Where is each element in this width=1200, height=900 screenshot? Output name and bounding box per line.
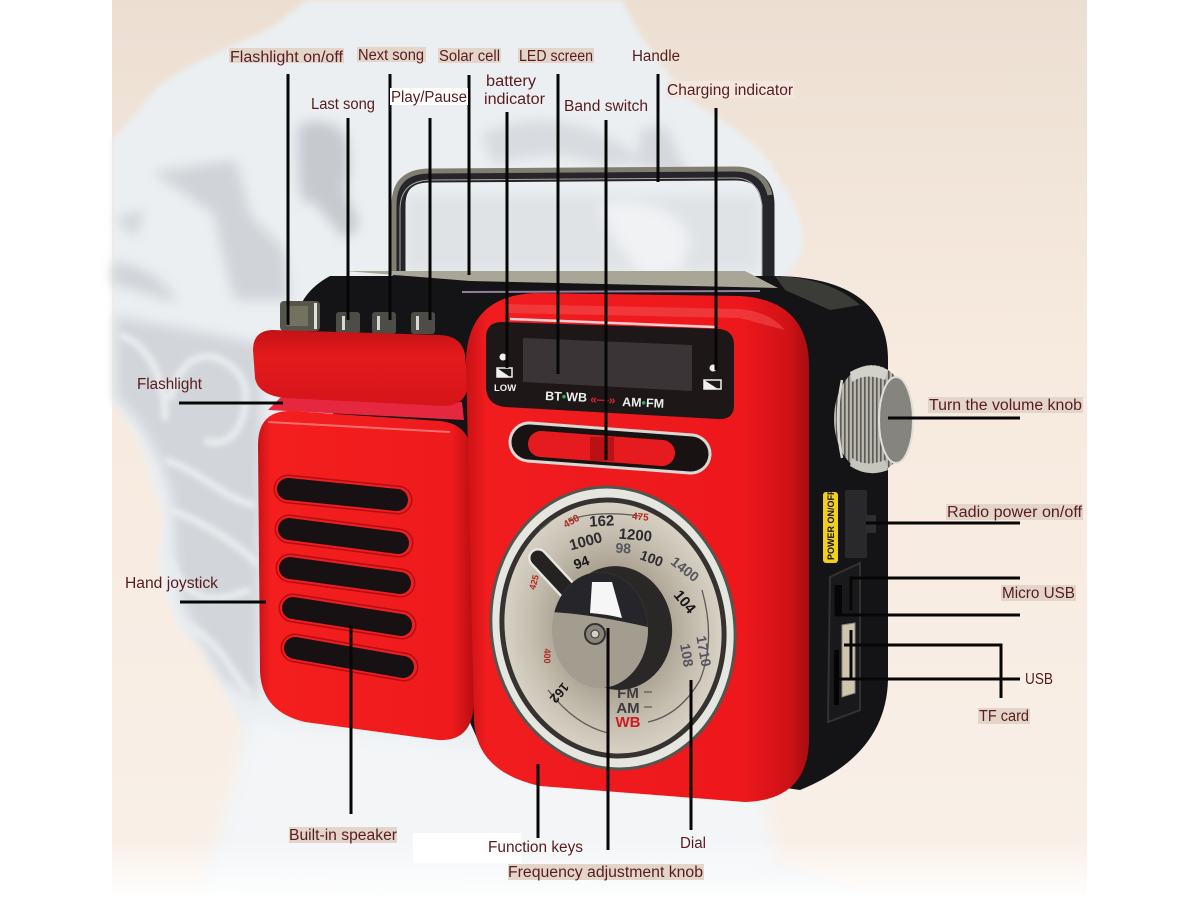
label: Turn the volume knob: Turn the volume knob [929, 397, 1082, 414]
flashlight on/off button [280, 301, 320, 331]
dial scale text: 98 [615, 540, 632, 556]
labels [125, 47, 1083, 881]
label: Micro USB: Micro USB [1002, 585, 1075, 602]
statue lower neck [200, 720, 780, 900]
LED display panel: AM•FM [622, 395, 664, 411]
label: Flashlight: Flashlight [137, 376, 203, 393]
dial scale text: 104 [670, 587, 699, 618]
LED display panel [486, 322, 734, 419]
LED screen [523, 338, 692, 391]
battery icon left: LOW [494, 383, 516, 394]
dial scale text: 1200 [618, 526, 653, 545]
label: Frequency adjustment knob: Frequency adjustment knob [508, 864, 703, 881]
label: Flashlight on/off: Flashlight on/off [230, 49, 344, 66]
dial scale text: AM [616, 700, 640, 717]
tuning dial [489, 486, 737, 770]
radio handle [394, 169, 770, 285]
dial scale text: 400 [542, 648, 552, 664]
dial scale text: 108 [677, 642, 697, 668]
dial scale arcs [540, 514, 709, 733]
dial scale text: 1400 [668, 553, 702, 585]
label: Charging indicator: Charging indicator [667, 82, 793, 99]
battery icon left [494, 354, 516, 394]
dial scale text: 1000 [568, 529, 604, 554]
dial scale text: 162 [589, 512, 615, 531]
front red panel [462, 291, 809, 802]
label: battery indicator: indicator [484, 91, 545, 108]
label: Built-in speaker: Built-in speaker [289, 827, 397, 844]
label: TF card: TF card [979, 708, 1029, 725]
label: battery indicator [484, 73, 545, 108]
dial scale text: 162 [547, 680, 572, 706]
leader lines [179, 74, 1020, 850]
side ports [828, 563, 860, 722]
battery icon right [704, 364, 721, 389]
dial scale text: 94 [571, 552, 592, 572]
label: battery indicator: battery [486, 73, 536, 90]
label: Solar cell: Solar cell [439, 48, 500, 65]
label: Radio power on/off: Radio power on/off [947, 504, 1083, 521]
speaker panel [258, 411, 474, 740]
label: Band switch: Band switch [564, 98, 648, 115]
speaker grille slots [288, 489, 404, 667]
band legend: BT•WB [545, 389, 587, 405]
power switch and label [823, 489, 876, 563]
power switch and label: POWER ON/OFF [826, 489, 836, 560]
label: Handle: Handle [632, 48, 680, 65]
dial scale text [527, 511, 715, 731]
song buttons [336, 312, 435, 334]
dial scale text: 100 [638, 547, 666, 570]
label: Play/Pause: Play/Pause [391, 89, 467, 106]
label: LED screen: LED screen [519, 48, 593, 65]
volume knob [834, 365, 913, 473]
dial scale text: 475 [631, 511, 650, 524]
label: Dial: Dial [680, 835, 706, 852]
label: Function keys: Function keys [488, 839, 583, 856]
flashlight housing [253, 330, 468, 420]
LED display panel: «—» [590, 392, 616, 407]
band switch [529, 437, 691, 461]
dial scale text: 450 [562, 513, 582, 531]
dial scale text: 425 [527, 574, 541, 591]
dial scale text: 1710 [693, 634, 715, 668]
dial scale text: FM [617, 685, 639, 702]
label: Last song: Last song [311, 96, 375, 113]
label: Hand joystick: Hand joystick [125, 575, 218, 592]
tuning knob [538, 558, 680, 697]
label: USB: USB [1025, 671, 1053, 688]
dial scale text: WB [616, 714, 641, 731]
radio rear black body [296, 271, 888, 790]
label: Next song: Next song [358, 47, 424, 64]
